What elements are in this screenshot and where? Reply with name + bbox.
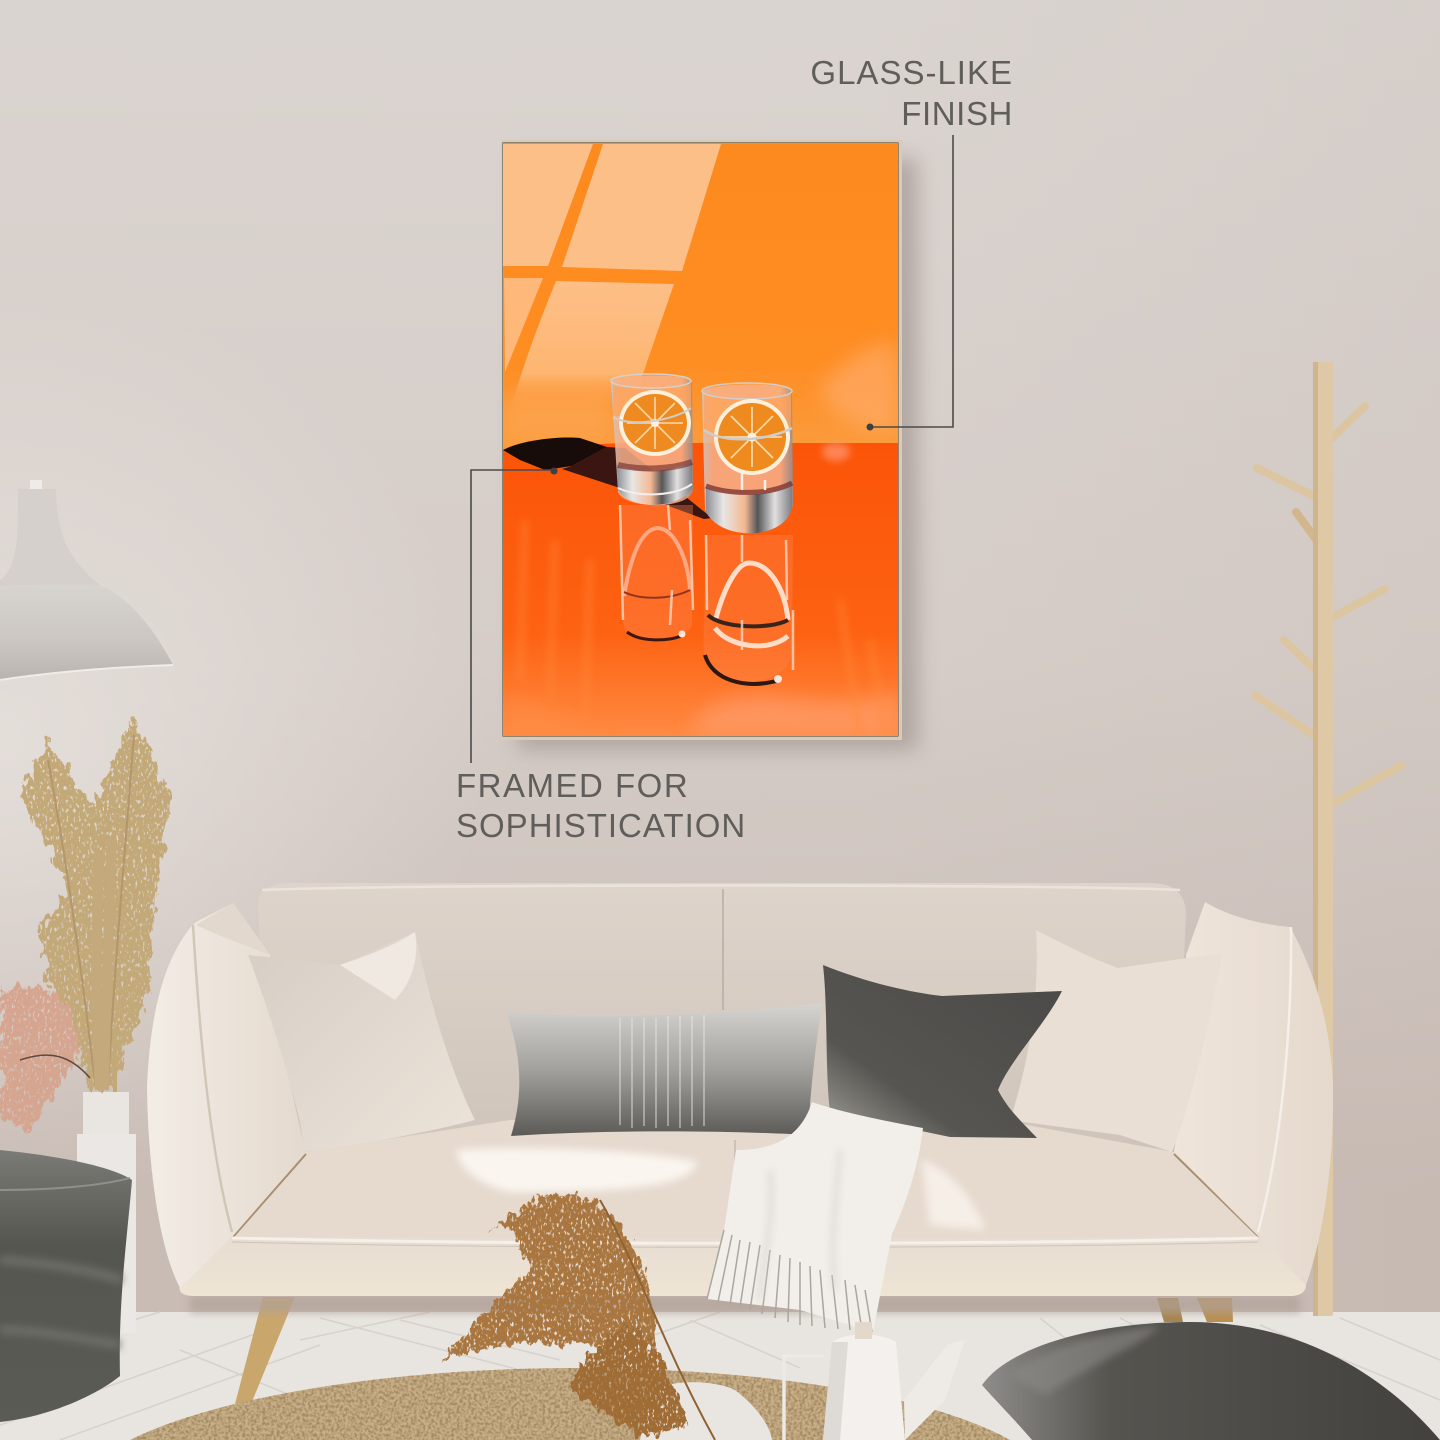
lamp neck bbox=[0, 489, 100, 592]
right arm bbox=[1174, 902, 1333, 1285]
sofa bbox=[147, 883, 1333, 1404]
sofa backrest bbox=[258, 883, 1186, 1150]
right glass with orange slice bbox=[702, 383, 793, 533]
upper wall of painting bbox=[503, 143, 898, 453]
leader dot bbox=[550, 468, 558, 474]
leader line bbox=[471, 470, 554, 763]
right glass reflection bbox=[704, 535, 793, 684]
left glass reflection bbox=[619, 505, 693, 640]
charcoal pillow bbox=[823, 965, 1062, 1138]
lamp cap bbox=[30, 480, 42, 489]
dried reed plant bbox=[442, 1194, 715, 1440]
wood frame bbox=[501, 140, 902, 740]
white ceramic vase bbox=[640, 1382, 772, 1440]
dark floor cushion bbox=[982, 1322, 1440, 1440]
cast shadow bbox=[503, 438, 712, 519]
sofa floor shadow bbox=[190, 1295, 1300, 1313]
woven jute rug bbox=[130, 1368, 1010, 1440]
lamp arm bbox=[0, 532, 22, 536]
wall art shadow bbox=[518, 158, 918, 750]
striped grey pillow bbox=[506, 1003, 822, 1136]
leader line bbox=[871, 135, 953, 427]
left glass with orange slice bbox=[611, 374, 693, 505]
beige pillow right bbox=[1010, 930, 1222, 1152]
white floor vase bbox=[77, 1092, 136, 1333]
framed art bbox=[501, 140, 902, 740]
lamp dome bbox=[0, 584, 173, 681]
label text line 2: SOPHISTICATION bbox=[456, 807, 746, 844]
white throw blanket bbox=[707, 1102, 923, 1332]
label text line 2: FINISH bbox=[901, 95, 1013, 132]
pink dried flowers bbox=[0, 986, 90, 1130]
label text line 1: GLASS-LIKE bbox=[810, 54, 1013, 91]
painting bbox=[503, 143, 898, 736]
pale wall glow bbox=[503, 344, 898, 440]
seat cushion bbox=[232, 1120, 1260, 1237]
table surface bbox=[503, 443, 898, 736]
pendant lamp bbox=[0, 480, 173, 681]
label text line 1: FRAMED FOR bbox=[456, 767, 689, 804]
beige pillow left bbox=[248, 932, 475, 1152]
wood coat tree bbox=[1255, 362, 1402, 1316]
sofa front rail bbox=[180, 1237, 1306, 1296]
callout: glass-like finish bbox=[810, 54, 1013, 430]
sunlight window panes bbox=[503, 144, 721, 404]
leader dot bbox=[866, 424, 874, 430]
inner dark edge bbox=[502, 142, 898, 736]
callout: framed for sophistication bbox=[456, 468, 746, 844]
pampas grass bbox=[20, 718, 172, 1092]
floor bbox=[0, 1312, 1440, 1440]
left arm bbox=[147, 903, 306, 1288]
white teapot bbox=[784, 1322, 965, 1440]
sofa legs bbox=[235, 1297, 1233, 1404]
grey pouf bbox=[0, 1150, 132, 1422]
